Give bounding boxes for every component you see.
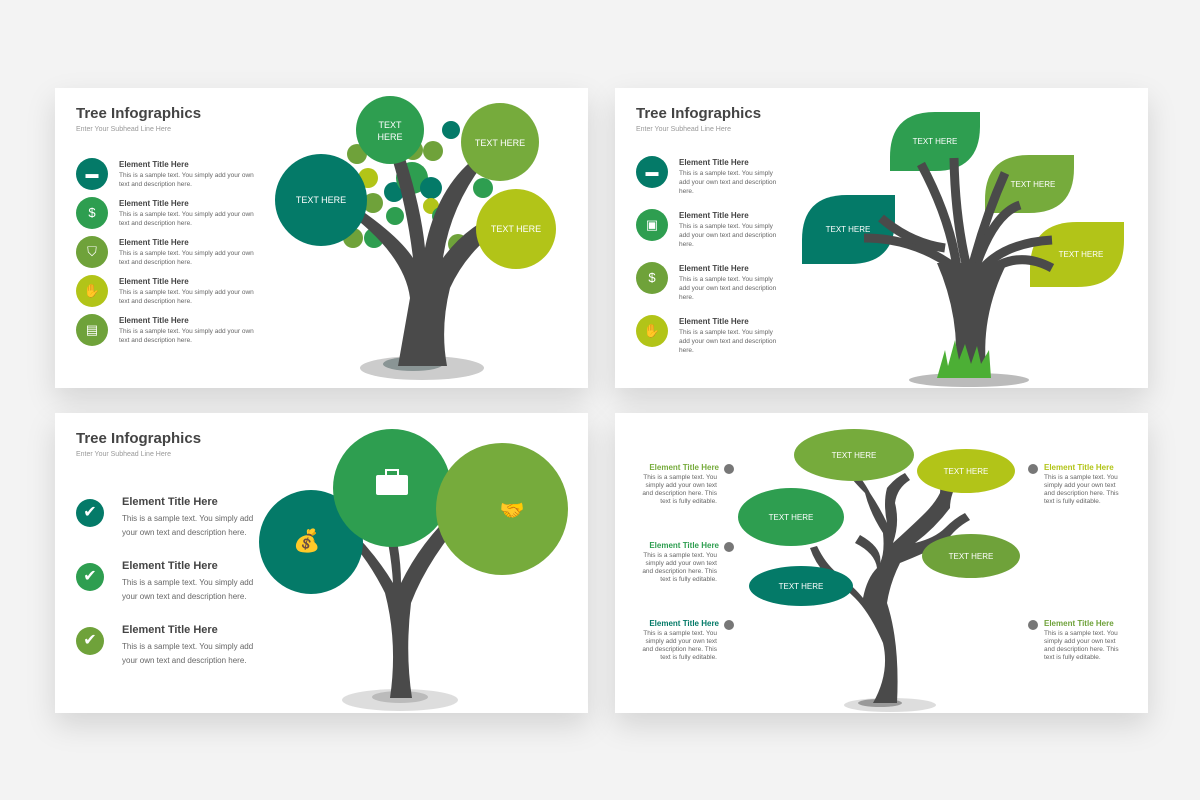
text block: right 2 [1028,619,1119,661]
ellipse: green left: TEXT HERE [769,513,813,522]
text block: left 1 [642,463,734,505]
list item 1: This is a sample text. You simply add your own text and description here. [679,170,776,195]
text block: left 1: text is fully editable. [660,498,717,505]
text block: left 3: This is a sample text. You [643,630,717,637]
leaf: light green: TEXT HERE [1011,180,1055,189]
check item 2 [76,560,253,601]
list item 1: This is a sample text. You simply add your own text and description here. [119,172,254,188]
text block: right 2: Element Title Here [1044,619,1114,628]
check item 3: This is a sample text. You simply add your own text and description here. [122,642,253,665]
list item 2: Element Title Here [679,211,749,220]
list item 4 [636,315,776,354]
leaf: lime: TEXT HERE [1059,250,1103,259]
list item 1 [636,156,776,195]
check item 1: Element Title Here [122,496,218,508]
text block: right 2: simply add your own text [1044,638,1116,645]
text block: left 2: text is fully editable. [660,576,717,583]
circle: teal [275,154,367,246]
list item 3: This is a sample text. You simply add your own text and description here. [679,276,776,301]
circle: lime [476,189,556,269]
tree graphic [275,96,556,380]
text block: left 2: and description here. This [642,568,718,575]
text block: left 3: Element Title Here [649,619,720,628]
check item 1 [76,496,253,537]
title: Tree Infographics [76,105,201,122]
subtitle: Enter Your Subhead Line Here [76,126,171,133]
title: Tree Infographics [76,430,201,447]
text block: left 1: and description here. This [642,490,718,497]
circle: green: HERE [377,132,403,142]
list item 4: Element Title Here [679,317,749,326]
text block: right 1: text is fully editable. [1044,498,1101,505]
subtitle: Enter Your Subhead Line Here [636,126,731,133]
circle: green: TEXT [378,120,402,130]
text block: right 2: and description here. This [1044,646,1119,653]
text block: left 1: This is a sample text. You [643,474,717,481]
ellipse: green left [738,488,844,546]
panel: slide 2 leaves tree [615,88,1148,388]
circle: green [356,96,424,164]
check item 3: ✔ [83,632,97,649]
circle: lime: TEXT HERE [491,224,541,234]
text block: right 1: simply add your own text [1044,482,1116,489]
text block: left 1: simply add your own text [645,482,717,489]
list item 5 [76,314,254,346]
check item 2: ✔ [83,568,97,585]
text block: left 2: This is a sample text. You [643,552,717,559]
list item 4: Element Title Here [119,277,189,286]
list item 2: ▣ [646,217,658,232]
ellipse: lime [917,449,1015,493]
leaf: light green [985,155,1074,213]
text block: right 1: Element Title Here [1044,463,1114,472]
list item 4: ✋ [84,283,100,298]
text block: left 3: and description here. This [642,646,718,653]
list item 2: This is a sample text. You simply add your own text and description here. [679,223,776,248]
panel: slide 1 circles tree [55,88,588,388]
list item 3: This is a sample text. You simply add your own text and description here. [119,250,254,266]
circle: light green: TEXT HERE [475,138,525,148]
text block: left 3 [642,619,734,661]
tree graphic [802,112,1124,387]
text block: left 3: text is fully editable. [660,654,717,661]
list item 4: This is a sample text. You simply add your own text and description here. [679,329,776,354]
text block: left 2: Element Title Here [649,541,720,550]
list item 4: ✋ [644,323,660,338]
ellipse: lime: TEXT HERE [944,467,988,476]
list item 3: Element Title Here [679,264,749,273]
text block: right 2: This is a sample text. You [1044,630,1118,637]
list item 3: $ [648,270,656,285]
list item 1: Element Title Here [679,158,749,167]
ellipse: teal: TEXT HERE [779,582,823,591]
leaf: green: TEXT HERE [913,137,957,146]
ellipse: olive [922,534,1020,578]
text block: right 2: text is fully editable. [1044,654,1101,661]
list item 4 [76,275,254,307]
list item 5: Element Title Here [119,316,189,325]
list item 3 [76,236,254,268]
text block: right 1: This is a sample text. You [1044,474,1118,481]
list item 2: $ [88,205,96,220]
check item 2: This is a sample text. You simply add your own text and description here. [122,578,253,601]
text block: left 2: simply add your own text [645,560,717,567]
text block: right 1: and description here. This [1044,490,1119,497]
list item 2 [76,197,254,229]
list item 3 [636,262,776,301]
list item 5: ▤ [86,322,98,337]
subtitle: Enter Your Subhead Line Here [76,451,171,458]
circle: light green handshake: 🤝 [500,500,524,522]
panel: slide 3 large circles tree [55,413,588,713]
list item 1: ▬ [646,164,658,179]
check item 1: This is a sample text. You simply add your own text and description here. [122,514,253,537]
text block: left 1: Element Title Here [649,463,720,472]
check item 3: Element Title Here [122,624,218,636]
tree graphic [642,429,1119,712]
circle: green briefcase [333,429,451,547]
leaf: lime [1030,222,1124,287]
list item 3: Element Title Here [119,238,189,247]
ellipse: green top: TEXT HERE [832,451,876,460]
ellipse: olive: TEXT HERE [949,552,993,561]
list item 1 [76,158,254,190]
tree graphic [259,429,568,711]
ellipse: green top [794,429,914,481]
check item 1: ✔ [83,504,97,521]
circle: teal: TEXT HERE [296,195,346,205]
circle: light green handshake [436,443,568,575]
check item 2: Element Title Here [122,560,218,572]
tree trunk and branches [864,158,1052,276]
circle: teal money [259,490,363,594]
leaf: green [890,112,980,171]
grass [937,340,991,378]
list item 1: Element Title Here [119,160,189,169]
list item 3: ⛉ [87,244,97,259]
list item 5: This is a sample text. You simply add your own text and description here. [119,328,254,344]
leaf: teal [802,195,895,264]
panel: slide 4 ellipse tree [615,413,1148,713]
circle: teal money: 💰 [293,528,321,554]
list item 2: Element Title Here [119,199,189,208]
list item 4: This is a sample text. You simply add your own text and description here. [119,289,254,305]
title: Tree Infographics [636,105,761,122]
text block: left 3: simply add your own text [645,638,717,645]
text block: right 1 [1028,463,1119,505]
check item 3 [76,624,253,665]
circle: light green [461,103,539,181]
list item 2: This is a sample text. You simply add your own text and description here. [119,211,254,227]
text block: left 2 [642,541,734,583]
ellipse: teal [749,566,853,606]
leaf: teal: TEXT HERE [826,225,870,234]
list item 2 [636,209,776,248]
list item 1: ▬ [86,166,98,181]
